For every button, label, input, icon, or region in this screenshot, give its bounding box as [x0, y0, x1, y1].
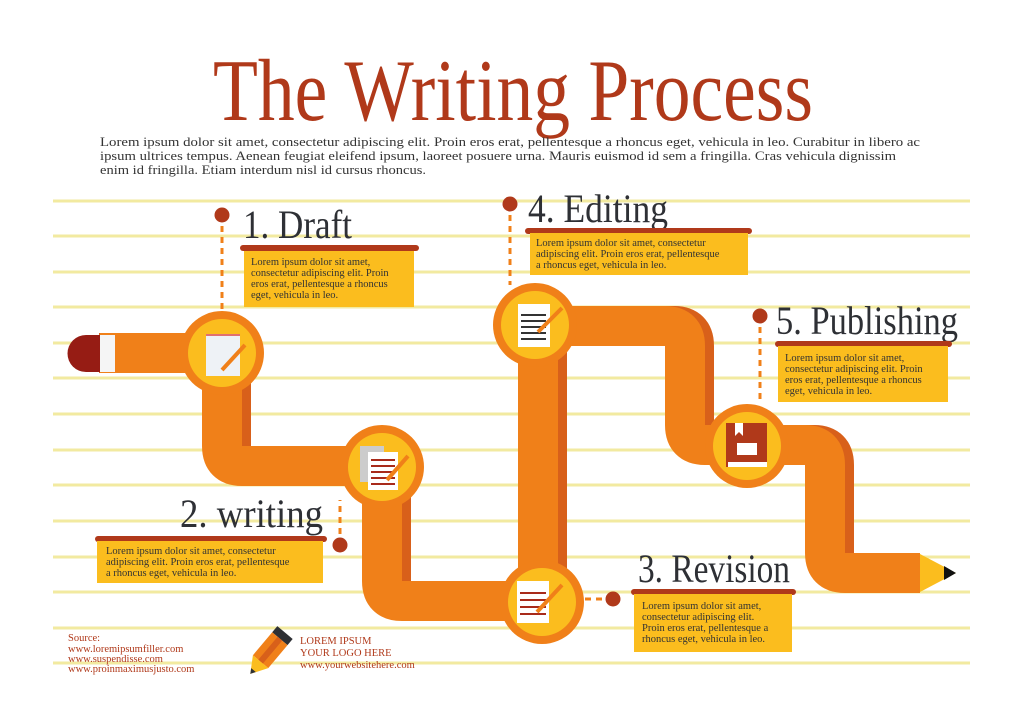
logo text: www.yourwebsitehere.com: [300, 660, 415, 671]
logo text: LOREM IPSUM: [300, 636, 372, 647]
logo text: YOUR LOGO HERE: [300, 648, 392, 659]
step 1: draft: Lorem ipsum dolor sit amet,: [251, 257, 370, 268]
step 5: publishing: [775, 298, 958, 402]
pencil eraser: [68, 335, 115, 372]
intro paragraph: ipsum ultrices tempus. Aenean feugiat eleifend ipsum, laoreet posuere urna. Mauris euismod id sem a fringilla. Cras vehicula dignissim: [100, 148, 896, 163]
pencil tip: [920, 554, 956, 592]
circle 1: draft icon: [180, 311, 264, 395]
step 2: writing: 2. writing: [180, 491, 323, 536]
step 4: editing: Lorem ipsum dolor sit amet, consectetur: [536, 238, 706, 249]
logo text: [300, 636, 415, 671]
step 3: revision: rhoncus eget, vehicula in leo.: [642, 634, 765, 645]
step 1: draft: 1. Draft: [243, 202, 352, 247]
circle 5: publishing icon: [705, 404, 789, 488]
title: The Writing Process: [213, 43, 813, 140]
connectors: [222, 204, 760, 599]
intro paragraph: [100, 134, 920, 177]
step 1: draft: eros erat, pellentesque a rhoncus: [251, 279, 388, 290]
step 4: editing: a rhoncus eget, vehicula in leo.: [536, 260, 666, 271]
step 1: draft: consectetur adipiscing elit. Proin: [251, 268, 389, 279]
intro paragraph: enim id fringilla. Etiam interdum nisl id cursus rhoncus.: [100, 162, 426, 177]
source: www.proinmaximusjusto.com: [68, 664, 194, 675]
step 4: editing: adipiscing elit. Proin eros erat, pellentesque: [536, 249, 720, 260]
step 5: publishing: eros erat, pellentesque a rhoncus: [785, 375, 922, 386]
source: Source:: [68, 633, 100, 644]
step 4: editing: 4. Editing: [528, 186, 668, 231]
step 2: writing: [95, 491, 327, 583]
circle 2: writing icon: [340, 425, 424, 509]
step 5: publishing: 5. Publishing: [776, 298, 958, 343]
step 5: publishing: consectetur adipiscing elit. Proin: [785, 364, 923, 375]
source: [68, 633, 194, 675]
step 3: revision: consectetur adipiscing elit.: [642, 612, 754, 623]
step 2: writing: adipiscing elit. Proin eros erat, pellentesque: [106, 557, 290, 568]
step 3: revision: Lorem ipsum dolor sit amet,: [642, 601, 761, 612]
icon: logo pencil: [243, 626, 293, 680]
step 5: publishing: Lorem ipsum dolor sit amet,: [785, 353, 904, 364]
step 5: publishing: eget, vehicula in leo.: [785, 386, 872, 397]
step 2: writing: Lorem ipsum dolor sit amet, consectetur: [106, 546, 276, 557]
step 3: revision: [631, 546, 796, 652]
source: www.suspendisse.com: [68, 654, 163, 665]
step 1: draft: [240, 202, 419, 307]
circle 3: revision icon: [500, 560, 584, 644]
step 1: draft: eget, vehicula in leo.: [251, 290, 338, 301]
source: www.loremipsumfiller.com: [68, 644, 183, 655]
step 2: writing: a rhoncus eget, vehicula in leo.: [106, 568, 236, 579]
intro paragraph: Lorem ipsum dolor sit amet, consectetur adipiscing elit. Proin eros erat, pellentesque a rhoncus eget, vehicula in leo. Curabitur in libero ac: [100, 134, 920, 149]
step 3: revision: 3. Revision: [638, 546, 790, 591]
pencil path: [99, 326, 920, 601]
step 3: revision: Proin eros erat, pellentesque a: [642, 623, 769, 634]
circle 4: editing icon: [493, 283, 577, 367]
step 4: editing: [525, 186, 752, 275]
